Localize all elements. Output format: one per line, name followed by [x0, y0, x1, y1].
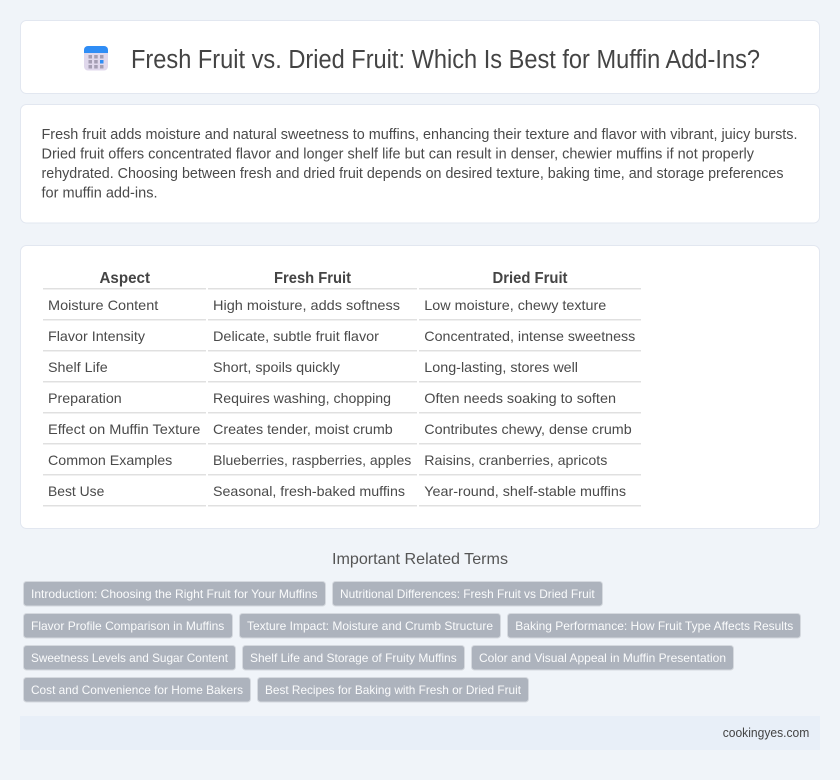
heading: related terms: Important Related Terms: [332, 551, 508, 568]
tag: [242, 646, 464, 670]
table header: Dried Fruit: [492, 270, 568, 287]
row: common examples: Common Examples: [48, 452, 172, 468]
table header: [100, 270, 568, 287]
row: best use: Year-round, shelf-stable muffins: [424, 483, 626, 499]
row: moisture content: Moisture Content: [48, 297, 158, 313]
row: effect on muffin texture: Effect on Muffin Texture: [48, 421, 201, 437]
tag: Cost and Convenience for Home Bakers: [31, 683, 243, 697]
row: moisture content: [48, 297, 607, 313]
tag: Nutritional Differences: Fresh Fruit vs Dried Fruit: [340, 587, 595, 601]
row: shelf life: Short, spoils quickly: [213, 359, 340, 375]
tags: related terms: [24, 582, 800, 702]
tag: Flavor Profile Comparison in Muffins: [31, 619, 224, 633]
row: common examples: Raisins, cranberries, apricots: [424, 452, 607, 468]
tag: [508, 614, 800, 638]
row: shelf life: [48, 359, 578, 375]
footer: [20, 716, 820, 750]
row: flavor intensity: Concentrated, intense sweetness: [424, 328, 635, 344]
footer source text: cookingyes.com: [723, 726, 809, 740]
tag: Sweetness Levels and Sugar Content: [31, 651, 229, 665]
row: effect on muffin texture: Creates tender, moist crumb: [213, 421, 393, 437]
tag: [24, 582, 326, 606]
tag: [24, 646, 236, 670]
row: common examples: Blueberries, raspberries, apples: [213, 452, 411, 468]
text block: introduction: rehydrated. Choosing between fresh and dried fruit depends on desired texture, baking time, and storage preferences: [42, 165, 784, 182]
tag: Shelf Life and Storage of Fruity Muffins: [250, 651, 457, 665]
tag: Color and Visual Appeal in Muffin Presentation: [479, 651, 726, 665]
tag: Introduction: Choosing the Right Fruit for Your Muffins: [31, 587, 318, 601]
row: preparation: Preparation: [48, 390, 122, 406]
row: moisture content: Low moisture, chewy texture: [424, 297, 607, 313]
tag: Texture Impact: Moisture and Crumb Structure: [247, 619, 493, 633]
tag: [472, 646, 734, 670]
row: effect on muffin texture: [48, 421, 632, 437]
row: preparation: [48, 390, 616, 406]
table header: Aspect: [100, 270, 151, 287]
tag: [24, 614, 232, 638]
icon: calendar: [84, 46, 108, 70]
tag: Baking Performance: How Fruit Type Affects Results: [515, 619, 793, 633]
tag: [240, 614, 500, 638]
row: preparation: Often needs soaking to soften: [424, 390, 616, 406]
row: flavor intensity: [48, 328, 635, 344]
row: moisture content: High moisture, adds softness: [213, 297, 400, 313]
row: effect on muffin texture: Contributes chewy, dense crumb: [424, 421, 632, 437]
row: best use: Best Use: [48, 483, 104, 499]
panel: introduction: [20, 104, 820, 223]
text block: introduction: Dried fruit offers concentrated flavor and longer shelf life but can result in denser, chewier muffins if not properly: [42, 146, 754, 162]
row: flavor intensity: Flavor Intensity: [48, 328, 145, 344]
row: flavor intensity: Delicate, subtle fruit flavor: [213, 328, 379, 344]
text block: introduction: Fresh fruit adds moisture and natural sweetness to muffins, enhancing their texture and flavor with vibrant, juicy bursts.: [42, 126, 798, 143]
row: best use: [48, 483, 626, 499]
table header: Fresh Fruit: [274, 270, 352, 287]
tag: Best Recipes for Baking with Fresh or Dried Fruit: [265, 683, 522, 697]
row: shelf life: Long-lasting, stores well: [424, 359, 578, 375]
text block: introduction: for muffin add-ins.: [42, 184, 158, 202]
text block: introduction: [42, 126, 798, 202]
panel: comparison table: [20, 246, 820, 528]
tag: [332, 582, 602, 606]
row: best use: Seasonal, fresh-baked muffins: [213, 483, 405, 499]
row: common examples: [48, 452, 607, 468]
panel: header: [20, 20, 820, 94]
title: Fresh Fruit vs. Dried Fruit: Which Is Best for Muffin Add-Ins?: [131, 46, 760, 74]
tag: [24, 678, 250, 702]
tag: [258, 678, 528, 702]
row: shelf life: Shelf Life: [48, 359, 108, 375]
row: preparation: Requires washing, chopping: [213, 390, 391, 406]
